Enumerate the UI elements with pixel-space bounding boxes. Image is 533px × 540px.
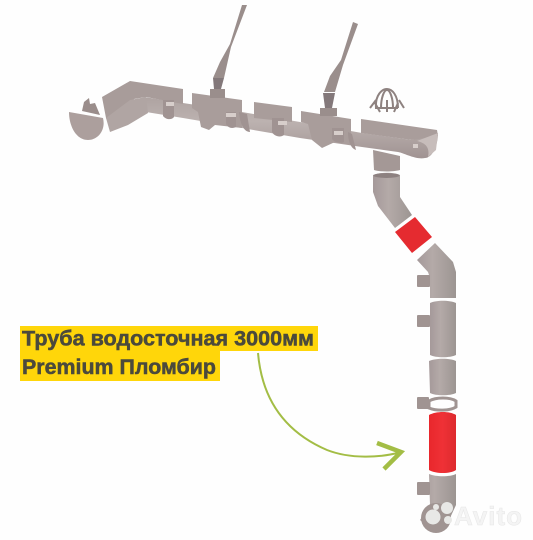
gutter strap brackets	[192, 93, 438, 148]
clamp	[417, 397, 456, 410]
watermark: Avito: Avito	[454, 501, 522, 531]
red pipe section upper	[395, 217, 432, 253]
gutter joint connectors	[163, 100, 356, 150]
leaf guard dome	[370, 89, 404, 112]
hook 2	[320, 22, 358, 116]
gutter joint highlights	[166, 102, 418, 148]
gutter end notch	[417, 133, 438, 157]
elbow 2	[417, 243, 456, 298]
label line 1: Труба водосточная 3000мм	[22, 328, 314, 350]
green arrow	[258, 353, 401, 469]
corner gutter piece	[69, 81, 183, 140]
elbow 1	[373, 173, 412, 228]
outlet	[373, 150, 400, 172]
label line 2: Premium Пломбир	[22, 356, 216, 379]
red pipe section lower	[429, 412, 456, 473]
label highlight and text	[20, 326, 318, 381]
pipe segment 2	[417, 301, 456, 357]
long gutter trough	[144, 97, 438, 158]
gutter run	[69, 81, 438, 158]
coupling	[429, 359, 456, 395]
bottom outlet elbow	[417, 474, 456, 533]
bracket upper	[417, 275, 430, 287]
hook 1	[210, 5, 247, 98]
